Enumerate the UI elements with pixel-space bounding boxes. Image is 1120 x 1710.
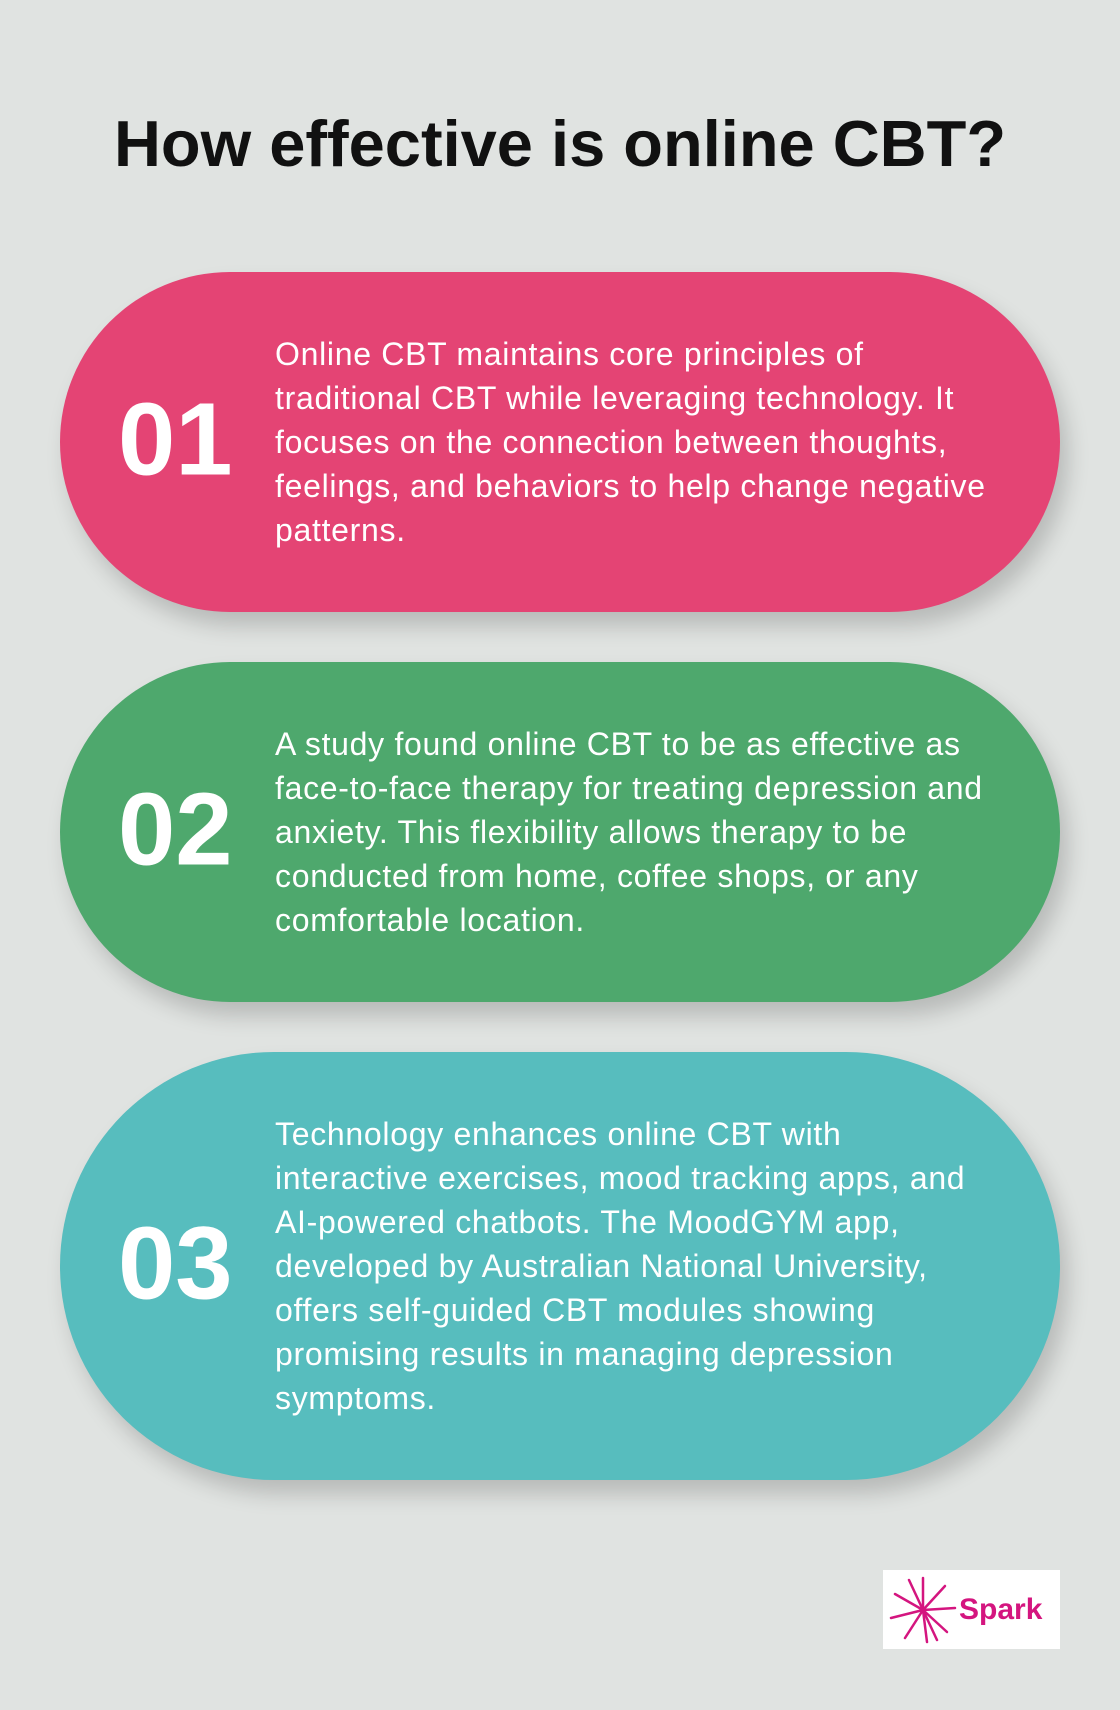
text 03: AI-powered chatbots. The MoodGYM app,: [275, 1204, 900, 1240]
panel: 02: [60, 662, 1060, 1002]
text 01: Online CBT maintains core principles of: [275, 336, 864, 372]
text 02: A study found online CBT to be as effective as: [275, 726, 961, 762]
text 01: [275, 336, 986, 548]
text 03: Technology enhances online CBT with: [275, 1116, 841, 1152]
text 02: [275, 726, 983, 938]
text 03: interactive exercises, mood tracking apps, and: [275, 1160, 965, 1196]
title: How effective is online CBT?: [114, 107, 1006, 180]
text 03: symptoms.: [275, 1380, 436, 1416]
icon: spark burst: [890, 1576, 956, 1644]
text 02: face-to-face therapy for treating depression and: [275, 770, 983, 806]
text 03: promising results in managing depression: [275, 1336, 894, 1372]
text 03: developed by Australian National University,: [275, 1248, 928, 1284]
text 03: offers self-guided CBT modules showing: [275, 1292, 875, 1328]
text 01: focuses on the connection between thoughts,: [275, 424, 947, 460]
number 01: 01: [118, 382, 233, 497]
panel: 03: [60, 1052, 1060, 1480]
text 02: conducted from home, coffee shops, or any: [275, 858, 919, 894]
text 01: feelings, and behaviors to help change negative: [275, 468, 986, 504]
text 02: comfortable location.: [275, 902, 585, 938]
text 02: anxiety. This flexibility allows therapy to be: [275, 814, 907, 850]
number 03: 03: [118, 1206, 233, 1321]
number 02: 02: [118, 772, 233, 887]
panel: 01: [60, 272, 1060, 612]
text 03: [275, 1116, 965, 1416]
logo text: Spark: [959, 1592, 1042, 1626]
text 01: traditional CBT while leveraging technology. It: [275, 380, 954, 416]
logo: Spark: [883, 1570, 1060, 1649]
text 01: patterns.: [275, 512, 406, 548]
